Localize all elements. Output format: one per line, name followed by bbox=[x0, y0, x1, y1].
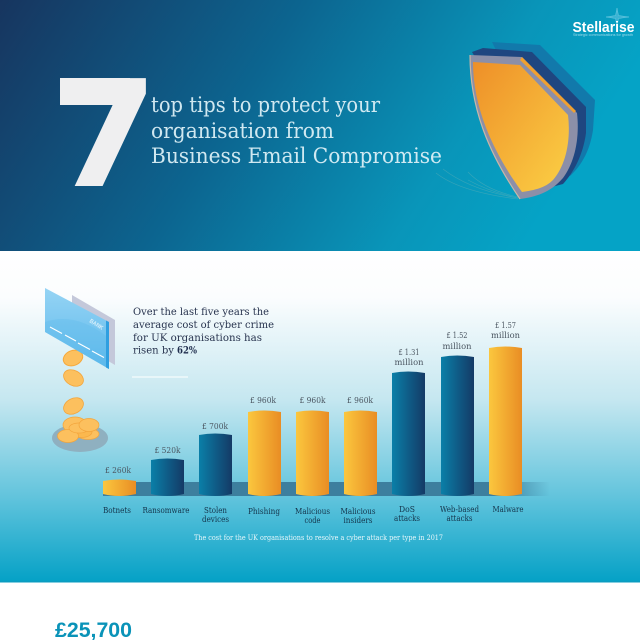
text block: 62% stat bbox=[133, 306, 274, 356]
panel: cyber crime cost bbox=[0, 251, 640, 582]
icon: bank card and coins: BANK bbox=[88, 319, 104, 332]
bar: Malicious insiders: Malicious bbox=[340, 507, 376, 517]
bar: Web-based attacks bbox=[440, 331, 479, 524]
bar: Phishing: Phishing bbox=[248, 507, 280, 517]
bar: Malicious code bbox=[295, 396, 330, 526]
bar: Web-based attacks: million bbox=[442, 342, 472, 352]
bar: Malicious insiders bbox=[340, 396, 377, 526]
bar: DoS attacks: attacks bbox=[394, 514, 420, 524]
bar: Botnets: £ 260k bbox=[105, 466, 132, 476]
title: top tips to protect your bbox=[151, 93, 381, 118]
text block: 62% stat: for UK organisations has bbox=[133, 332, 262, 344]
bar: DoS attacks: million bbox=[394, 358, 424, 368]
big number 7: 7 bbox=[52, 49, 158, 221]
logo: Stellarise: Stellarise bbox=[572, 19, 634, 36]
bar: Botnets bbox=[103, 466, 136, 516]
bar: Stolen devices: Stolen bbox=[204, 506, 227, 516]
logo: Stellarise: Strategic communications for growth bbox=[573, 33, 633, 37]
bar: Stolen devices: £ 700k bbox=[202, 422, 229, 432]
text block: 62% stat: Over the last five years the bbox=[133, 306, 269, 318]
bar: Web-based attacks: attacks bbox=[446, 514, 472, 524]
bar: Malware bbox=[489, 321, 524, 515]
text block: 62% stat: risen by bbox=[133, 344, 174, 356]
bar chart: cost per attack type bbox=[103, 321, 550, 526]
bar: Malicious code: Malicious bbox=[295, 507, 330, 517]
text block: 62% stat: 62% bbox=[177, 344, 197, 356]
bar: Malicious insiders: insiders bbox=[344, 516, 372, 526]
icon: bank card and coins bbox=[45, 288, 115, 452]
bar: Malware: Malware bbox=[492, 505, 524, 515]
icon: shield bbox=[470, 42, 595, 199]
bar: Ransomware bbox=[142, 446, 190, 516]
bar: DoS attacks: DoS bbox=[399, 505, 415, 515]
bar: DoS attacks: £ 1.31 bbox=[398, 348, 420, 358]
bar: Malicious insiders: £ 960k bbox=[347, 396, 374, 406]
bar: Ransomware: £ 520k bbox=[154, 446, 181, 456]
bar: Phishing: £ 960k bbox=[250, 396, 277, 406]
title: organisation from bbox=[151, 119, 334, 144]
bar: Phishing bbox=[248, 396, 281, 517]
logo: Stellarise bbox=[572, 8, 634, 37]
title: Business Email Compromise bbox=[151, 144, 442, 169]
bar: Malware: £ 1.57 bbox=[495, 321, 516, 331]
bar: Malicious code: code bbox=[304, 516, 320, 526]
chart caption: The cost for the UK organisations to resolve a cyber attack per type in 2017 bbox=[194, 533, 443, 542]
bar: Web-based attacks: Web-based bbox=[440, 505, 479, 515]
bar: Stolen devices: devices bbox=[202, 515, 229, 525]
text block: 62% stat: average cost of cyber crime bbox=[133, 319, 274, 331]
bar: Ransomware: Ransomware bbox=[142, 506, 190, 516]
header banner bbox=[0, 0, 640, 251]
bar: Malicious code: £ 960k bbox=[300, 396, 326, 406]
bar: Botnets: Botnets bbox=[103, 506, 131, 516]
circuit lines bbox=[436, 169, 518, 199]
bar: Malware: million bbox=[491, 331, 521, 341]
bar: DoS attacks bbox=[392, 348, 425, 524]
bar: Stolen devices bbox=[199, 422, 232, 525]
bar: Web-based attacks: £ 1.52 bbox=[446, 331, 468, 341]
